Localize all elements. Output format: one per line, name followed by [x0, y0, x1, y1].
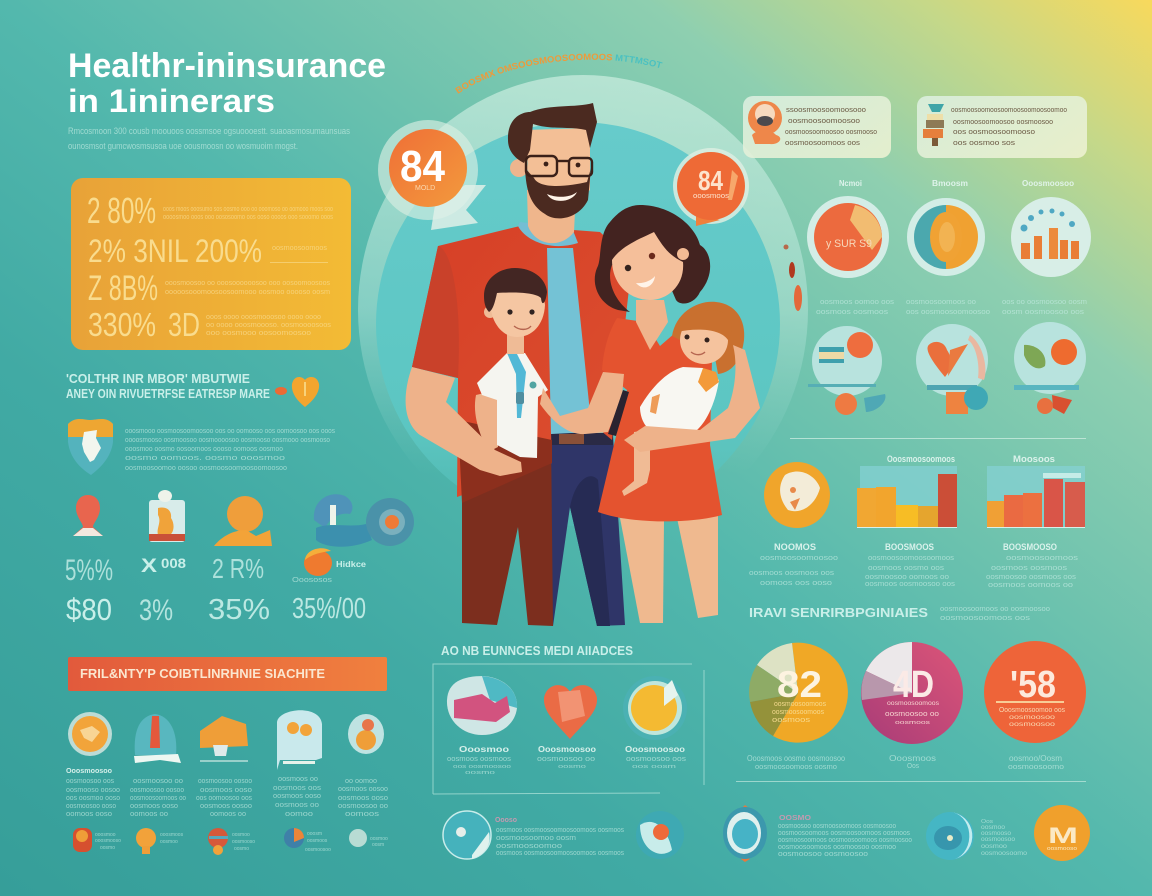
statistics row: second — [66, 592, 366, 627]
icon row: people and care — [73, 490, 414, 547]
icon: teal globe left — [443, 811, 491, 859]
icon: orange house — [200, 716, 248, 762]
card: insurance note one: oosmoosoomoosoo — [788, 118, 860, 125]
icon: orange figure — [748, 101, 782, 144]
title: in 1ininerars — [68, 83, 275, 119]
card: insurance note two: oosmoosoomoosoomoosoomoosoomoo — [951, 107, 1067, 114]
statistics row: first: Hidkce — [336, 560, 367, 569]
pie captions: Ooosmoos — [889, 754, 936, 763]
text columns: family coverage: oomoos — [345, 811, 380, 818]
pie chart: 4D: 4D — [893, 664, 934, 706]
heading: coverage: 'COLTHR INR MBOR' MBUTWIE — [66, 371, 250, 386]
divider — [736, 781, 1086, 782]
father glasses — [526, 156, 592, 176]
text block: bottom right: oosmoosoo oosmoosoo — [778, 851, 868, 858]
icon: heart check — [916, 324, 988, 414]
small icons with captions: oosmoos — [307, 838, 328, 844]
text: pink blob — [447, 745, 512, 776]
chart circle: three — [1011, 179, 1091, 277]
badge: left statistic: 84 — [400, 142, 445, 191]
pie captions: Oos — [907, 763, 919, 770]
heading: medical advantages: AO NB EUNNCES MEDI AIIADCES — [441, 644, 633, 658]
text columns: family coverage: oosmoosoo oo — [338, 803, 388, 810]
statistic 3 — [88, 269, 330, 308]
small icons with captions: oosm — [372, 842, 384, 848]
text columns: family coverage: oosmoos ooso — [200, 787, 252, 794]
text columns: family coverage: oosmoos oo — [275, 802, 319, 809]
subtitle: Rmcosmoon 300 cousb moouoos oossmsoe ogsuoooestt. suaoasmosumaunsuas — [68, 126, 350, 136]
icon: golden circle — [623, 676, 687, 740]
text block: bottom centre: Oooso — [495, 817, 517, 824]
text block: small list: oosmoosoomo — [981, 851, 1028, 857]
chart circle: two: Bmoosm — [932, 179, 968, 188]
icon: heart — [544, 685, 597, 739]
text: pink blob: oos oosmoosoo — [453, 764, 511, 770]
father neck and head — [527, 190, 576, 243]
statistic 4: ooo oosmooo oosoomoosoo — [206, 330, 311, 337]
text block: small list: oosmoo — [981, 825, 1006, 831]
card: insurance note one: oosmoosoomoos oos — [785, 140, 861, 147]
card: insurance note one: ssoosmoosoomoosooo — [786, 107, 866, 114]
girl head — [672, 302, 744, 374]
statistic 1: ooos moos ooosumo sos oosmo ooo oo ooomoso oo oomooo moos soo — [163, 206, 333, 213]
boy neck and head — [507, 330, 524, 354]
card: insurance note one — [743, 96, 891, 158]
chart: bar chart right — [987, 454, 1085, 528]
banner: family coverage — [68, 657, 387, 691]
mother dress — [598, 318, 722, 521]
text columns: family coverage: oosmoos oosoo — [338, 786, 388, 793]
icon: shield — [68, 419, 113, 475]
text columns: family coverage: oos oosmoo ooso — [66, 795, 120, 802]
card: insurance note two: oosmoosoomoosoo oosmoosoo — [953, 119, 1053, 126]
chart circle: three: Ooosmoosoo — [1022, 179, 1074, 188]
card: insurance note one: oosmoosoomoosoo oosmooso — [785, 129, 877, 136]
pie chart: 58: Ooosmoosoomoo oos — [999, 707, 1065, 714]
text block: small list: oosmoo — [981, 844, 1008, 850]
icon: blue device — [314, 494, 414, 547]
icon: orange heart — [275, 377, 319, 407]
text block: bottom right: oosmoosoomoos oosmoosoomoos oosmoos — [778, 830, 910, 837]
pie captions: oosmoosoomo — [1008, 764, 1064, 771]
icon: watch — [723, 805, 767, 862]
pie chart: 58: oosmoosoo — [1009, 715, 1056, 721]
title: Healthr-ininsurance — [68, 47, 386, 85]
mother legs — [620, 518, 664, 623]
small icons with captions: oosmoosoo — [305, 847, 331, 853]
text: golden circle: Ooosmoosoo — [625, 745, 685, 754]
text block: bottom centre: oosmoos oosmoosoomoosoomoos oosmoos — [496, 827, 624, 834]
statistic 4 — [88, 306, 332, 343]
heading: coverage: ANEY OIN RIVUETRFSE EATRESP MARE — [66, 386, 270, 401]
captions under chart circles: oos oosmoosoomoosoo — [906, 309, 990, 316]
small icons with captions: oosmoo — [370, 836, 388, 842]
text block: small list: oosmoosoo — [981, 837, 1016, 843]
boy — [475, 268, 548, 458]
statistic 4: 3D — [168, 306, 200, 343]
chart: bar chart right: Moosoos — [1013, 454, 1055, 464]
boy shirt — [477, 353, 548, 458]
pie chart: 82 — [749, 643, 848, 743]
icon: fruit — [1014, 322, 1086, 414]
pie chart: 4D: oosmoosoo oo — [885, 711, 939, 718]
pie chart: 58: '58 — [1010, 664, 1056, 706]
text columns under charts: oosmoos oosmo oos — [868, 565, 945, 572]
small icons with captions: oosmoo — [232, 832, 250, 838]
text columns: family coverage: oosmoosoo oosoo — [198, 778, 252, 785]
statistics row: first — [65, 548, 367, 587]
text columns under charts: BOOSMOOS — [885, 542, 934, 552]
mother's holding arm — [624, 345, 760, 452]
badge: orange bottom right: oosmooso — [1047, 846, 1077, 852]
text block: coverage: oooosmooso oosmoosoo oosmoooosoo oosmooso oosmooo oosmooso — [125, 437, 330, 444]
text: pink blob: Ooosmoo — [459, 745, 509, 754]
icon: orange figure — [214, 496, 272, 546]
pie chart: 82: 82 — [777, 664, 822, 705]
badge: orange bottom right — [1034, 805, 1090, 861]
text columns: family coverage: oosmoos oosoo — [200, 803, 252, 810]
statistic 4: oo oooo ooosmoooso. oosmoooosoos — [206, 322, 332, 329]
captions under chart circles: oos oo oosmoosoo oosm — [1002, 299, 1087, 306]
small icons with captions: oosmo — [100, 845, 115, 851]
chart circle: one — [807, 179, 889, 278]
text block: coverage: ooosmoo oosmo oosoomoos oooso oomoos oosmoo — [125, 446, 283, 453]
mother — [595, 205, 722, 623]
statistics row: first: 008 — [161, 555, 186, 571]
statistic 3: ooooosooomoosoosoomooo oosmoo ooooso oosm — [165, 289, 330, 296]
text block: coverage — [125, 428, 335, 472]
text columns under charts — [749, 542, 1079, 589]
text columns: family coverage: oosmooso oosoo — [66, 787, 120, 794]
text columns under charts: oosmoosoo oomoos oo — [865, 574, 949, 581]
text block: bottom right: oosmoosoo oosmoosoomoos oosmoosoo — [778, 823, 896, 830]
title — [68, 47, 386, 119]
text columns under charts: oosmoosoomoosoo — [760, 555, 838, 562]
statistic 1: 2 80% — [87, 190, 156, 231]
text columns: family coverage: oomoo — [285, 811, 313, 818]
panel: statistics card — [71, 178, 351, 350]
icon: teal globe right — [636, 811, 684, 859]
statistic 3: Z 8B% — [88, 269, 158, 308]
text columns: family coverage — [66, 768, 388, 818]
text block: bottom right — [778, 815, 912, 858]
banner: family coverage: FRIL&NTY'P COIBTLINRHNIE SIACHITE — [80, 666, 325, 681]
small icons with captions: ooosmooso — [95, 838, 121, 844]
pie captions: oosmoo/Oosm — [1009, 754, 1062, 763]
panel: medical advantages — [433, 664, 704, 794]
small icons with captions: ooosmoo — [95, 832, 116, 838]
text: golden circle: oos oosm — [632, 764, 676, 770]
mother hair — [595, 205, 710, 312]
icon: medicine — [808, 326, 885, 415]
illustration: family — [406, 103, 760, 626]
icon: lamp — [134, 714, 181, 763]
text columns under charts: oosmoosoomoos — [1006, 555, 1079, 562]
father shirt — [412, 226, 632, 497]
text columns under charts: oosmoos oosmoos — [991, 565, 1068, 572]
text columns: family coverage: oomoos oo — [210, 811, 246, 818]
text: golden circle: oosmoosoo oos — [626, 756, 687, 763]
curved caption over ring: BOOSMX OMSOOSMOOSOOMOOS MTTMSOT — [455, 54, 662, 94]
pie chart: 4D: oosmoos — [895, 720, 931, 726]
badge: left statistic: MOLD — [415, 185, 435, 192]
row of chart circles — [807, 179, 1091, 278]
statistic 2: 2% 3NIL 200% — [88, 233, 262, 269]
text columns: family coverage: oosmoos ooso — [130, 803, 178, 810]
text columns: family coverage: oosmoos ooso — [338, 795, 388, 802]
icon: family egg — [348, 714, 384, 754]
statistics row: first: 2 R% — [212, 553, 264, 584]
heading: coverage — [66, 371, 270, 401]
text columns: family coverage: oosmoos oos — [273, 785, 322, 792]
icon: pink blob — [447, 676, 517, 735]
chart: bar chart left — [857, 454, 957, 528]
card: insurance note two: oos oosmoo sos — [953, 140, 1016, 147]
icon: jar — [149, 490, 185, 542]
badge: left statistic — [378, 120, 486, 230]
icon: dome — [277, 710, 322, 770]
row of illustrated health icons — [808, 322, 1086, 415]
heading: benefits: IRAVI SENRIRBPGINIAIES — [749, 605, 928, 620]
text block: coverage: oosmoosoomoo oosoo oosmoosoomoosoomoosoo — [125, 465, 287, 472]
pie chart: 82: oosmoosoomoos — [774, 701, 826, 708]
badge: orange bottom right: M — [1048, 823, 1078, 848]
text: heart: oosmo — [558, 764, 586, 770]
text columns under charts: oomoos oos ooso — [760, 580, 832, 587]
icon: orange capsule — [304, 548, 332, 576]
text block: bottom right: oosmoosoomoos oosmoosoo oosmoo — [778, 844, 896, 851]
pie captions: Ooosmoos oosmo oosmoosoo — [747, 754, 845, 763]
text: heart: oosmoosoo oo — [537, 756, 595, 763]
text columns: family coverage: oos oomoosoo oos — [196, 795, 252, 802]
pie captions — [747, 754, 1064, 771]
text columns under charts: oosmoos oomoos oo — [988, 582, 1073, 589]
text columns: family coverage: oosmoos oo — [278, 776, 318, 783]
divider — [790, 438, 1086, 439]
text columns: family coverage: oosmoosoo oos — [66, 778, 114, 785]
statistic 1: oooosmoo ooos ooo oososoomo oos ooso oooos ooo sooomo ooos — [163, 214, 333, 221]
girl leg — [622, 430, 650, 496]
text block: coverage: ooosmooo oosmoosoomoosoo oos oo oomooso oos oomoosoo oos ooos — [125, 428, 335, 435]
captions under chart circles: oosm oosmoosoo oos — [1002, 309, 1085, 316]
captions under chart circles: oosmoosoomoos oo — [906, 299, 976, 306]
pie chart: 58 — [984, 641, 1086, 743]
statistic 3: ooosmoosoo oo ooosoooooosoo ooo oosoomoosoos — [165, 280, 330, 287]
text columns: family coverage: oosmoosoo oo — [133, 778, 183, 785]
statistic 2: oosmoosoomoos — [272, 245, 328, 252]
small icons with captions: oosmoo — [160, 839, 178, 845]
pie captions: oosmoosoomoos oosmo — [755, 764, 837, 771]
mother face — [612, 232, 683, 300]
statistic 4: 330% — [88, 306, 156, 343]
text columns: family coverage: oomoos oo — [130, 811, 168, 818]
icon: orange plate — [68, 712, 112, 756]
text columns under charts: oosmoosoomoosoomoos — [868, 555, 955, 562]
father legs — [462, 460, 555, 626]
small icons with captions: ooosmoos — [160, 832, 184, 838]
heading: benefits — [749, 605, 1050, 622]
statistic 4: ooos oooo ooosmooosoo oooo oooo — [206, 314, 321, 321]
pie chart: 4D — [861, 642, 963, 744]
central halo ring — [358, 75, 808, 545]
father arm — [406, 367, 522, 476]
text: pink blob: oosmoos oosmoos — [447, 756, 512, 763]
text columns: family coverage: oomoos ooso — [66, 811, 112, 818]
text block: small list: oosmooso — [981, 831, 1012, 837]
text columns: family coverage: Ooosmoosoo — [66, 768, 112, 775]
boy arm and mother's arm — [540, 372, 624, 434]
text: heart — [537, 745, 596, 770]
text block: bottom centre: oosmoosoomoo — [496, 843, 562, 850]
text: heart: Ooosmoosoo — [538, 745, 596, 754]
subtitle: ounosmsot gumcwosmsusoa uoe oousmoosn oo wosmuoim mogst. — [68, 141, 298, 151]
icon: stack — [923, 104, 944, 146]
subtitle — [68, 126, 350, 151]
text block: small list: Oos — [981, 819, 994, 825]
pie chart: 58: oosmoosoo — [1009, 722, 1056, 728]
text columns: family coverage: oosmoosoo oosoo — [130, 787, 184, 794]
heading: benefits: oosmoosoomoos oo oosmoosoo — [940, 606, 1050, 613]
text columns under charts: oosmoosoo oosmoos oos — [986, 574, 1077, 581]
statistics row: second: 3% — [139, 594, 173, 627]
text columns under charts: NOOMOS — [774, 542, 816, 552]
card: insurance note two — [917, 96, 1087, 158]
text columns under charts: oosmoos oosmoosoo oos — [865, 581, 956, 588]
text block: bottom centre: oosmoosoomoo oosm — [496, 835, 576, 842]
text block: bottom centre: oosmoos oosmoosoomoosoomoos oosmoos — [496, 850, 624, 857]
small icons with captions: oosmooso — [232, 839, 255, 845]
small icons with captions — [73, 828, 388, 855]
girl body — [640, 367, 719, 433]
badge: right statistic — [673, 148, 749, 226]
text block: coverage: oosmo oomoos. oosmo ooosmoo — [125, 455, 285, 462]
text columns under charts: BOOSMOOSO — [1003, 542, 1057, 552]
icon row: family coverage — [68, 710, 384, 770]
statistics row: second: 35% — [208, 594, 270, 626]
small icons with captions: oosmo — [234, 846, 249, 852]
statistics row: second: 35%/00 — [292, 593, 366, 625]
pie chart: 4D: oosmoosoomoos — [887, 701, 939, 707]
text block: bottom centre — [495, 817, 624, 857]
icon: orange round chart — [764, 462, 830, 528]
father — [412, 103, 632, 626]
text: golden circle — [625, 745, 687, 770]
icon: person — [73, 495, 103, 536]
text block: bottom right: OOSMO — [779, 815, 812, 822]
small icons with captions: ooosm — [307, 831, 322, 837]
text columns: family coverage: oosmoosoomoos oo — [130, 795, 186, 802]
pie chart: 82: oosmoos — [772, 717, 811, 724]
text: pink blob: oosmo — [465, 770, 495, 776]
chart circle: two — [907, 179, 985, 276]
captions under chart circles: oosmoos oosmoos — [816, 309, 889, 316]
captions under chart circles — [816, 299, 1087, 316]
captions under chart circles: oosmoos oomoo oos — [820, 299, 895, 306]
text block: bottom right: oosmoosoomoos oosmoosoomoos oosmoosoo — [778, 837, 912, 844]
statistics row: first: X — [141, 556, 157, 577]
text columns: family coverage: oo oomoo — [345, 778, 377, 785]
chart: bar chart left: Ooosmoosoomoos — [887, 454, 955, 464]
heading: benefits: oosmoosoomoos oos — [940, 615, 1031, 622]
icon: blue lens — [926, 812, 974, 860]
chart circle: one: Ncmoi — [839, 179, 862, 188]
text columns under charts: oosmoos oosmoos oos — [749, 570, 835, 577]
statistics row: first: 5%% — [65, 554, 113, 587]
badge: right statistic: 84 — [698, 165, 723, 196]
text columns: family coverage: oosmoosoo ooso — [66, 803, 116, 810]
text columns: family coverage: oosmoos ooso — [273, 793, 321, 800]
statistics row: first: Ooososos — [292, 577, 333, 584]
statistic 1 — [87, 190, 333, 231]
chart circle: one: y SUR S9 — [826, 238, 872, 250]
badge: right statistic: ooosmoos — [693, 193, 730, 200]
pie chart: 82: oosmoosoomoos — [772, 709, 824, 716]
text block: small list — [981, 819, 1028, 857]
card: insurance note two: oos oosmoosoomooso — [953, 129, 1035, 136]
statistics row: second: $80 — [66, 592, 112, 627]
decorative red marks on ring — [784, 244, 802, 311]
girl — [622, 302, 744, 496]
